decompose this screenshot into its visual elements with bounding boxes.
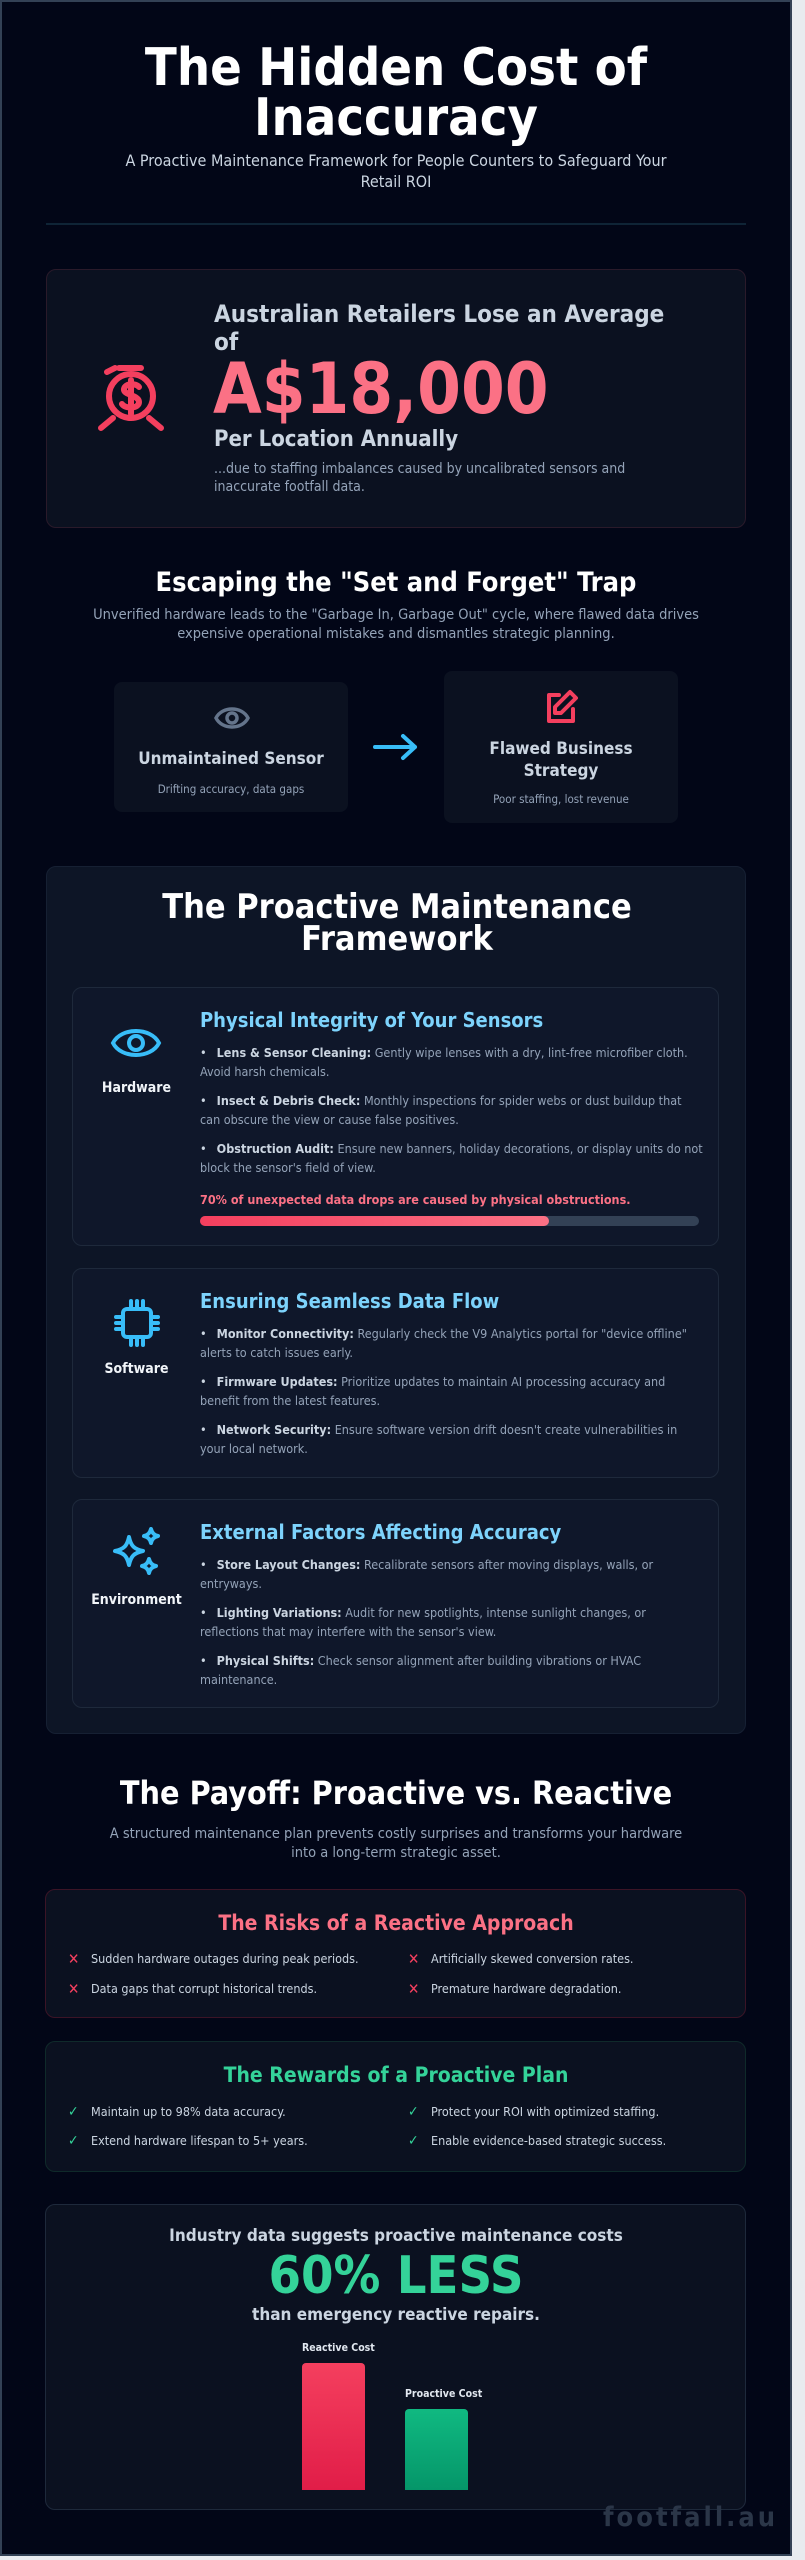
- bullets: Lens & Sensor Cleaning: Gently wipe lenses with a dry, lint-free microfiber cloth. Avoid harsh chemicals.: [200, 1045, 688, 1079]
- bullets: Insect & Debris Check: Monthly inspections for spider webs or dust buildup that can obscure the view or cause false positives.: [200, 1093, 682, 1127]
- card: environment: [72, 1499, 719, 1708]
- risk items: ✕: [68, 1980, 79, 1998]
- icon: chip: [114, 1299, 160, 1347]
- panel: framework: [46, 866, 746, 1734]
- risk items: ✕: [68, 1950, 79, 1968]
- panel: risks: [45, 1889, 746, 2018]
- bullets: Network Security: Ensure software version drift doesn't create vulnerabilities in your local network.: [200, 1422, 677, 1456]
- title: [489, 739, 633, 781]
- heading: escaping trap: Escaping the "Set and Forget" Trap: [156, 567, 636, 598]
- risk items: Artificially skewed conversion rates.: [431, 1951, 634, 1966]
- sub: Drifting accuracy, data gaps: [158, 782, 304, 796]
- text: than reactive: than emergency reactive repairs.: [252, 2305, 540, 2325]
- risk items: Sudden hardware outages during peak periods.: [91, 1951, 359, 1966]
- bullets: Physical Shifts: Check sensor alignment after building vibrations or HVAC maintenance.: [200, 1653, 641, 1687]
- risk items: Premature hardware degradation.: [431, 1981, 621, 1996]
- text: escaping description: expensive operational mistakes and dismantles strategic planning.: [177, 626, 615, 642]
- bullets: Monitor Connectivity: Regularly check the V9 Analytics portal for "device offline" alerts to catch issues early.: [200, 1326, 687, 1360]
- bullets: Obstruction Audit: Ensure new banners, holiday decorations, or display units do not block the sensor's field of view.: [200, 1141, 703, 1175]
- heading: Ensuring Seamless Data Flow: [200, 1289, 499, 1313]
- heading: rewards: The Rewards of a Proactive Plan: [224, 2063, 568, 2087]
- heading: framework: The Proactive Maintenance: [162, 887, 632, 927]
- description: ...due to staffing imbalances caused by uncalibrated sensors and: [214, 461, 625, 477]
- reward items: Maintain up to 98% data accuracy.: [91, 2104, 286, 2119]
- reward items: ✓: [68, 2104, 79, 2120]
- title: [145, 38, 648, 148]
- text: payoff description: into a long-term strategic asset.: [291, 1845, 501, 1861]
- icon: eye grey: [214, 707, 250, 729]
- bar: reactive: [302, 2342, 375, 2490]
- per location: Per Location Annually: [214, 427, 458, 452]
- big number: A$18,000: [213, 348, 549, 430]
- icon: edit pen: [547, 690, 578, 723]
- risk items: ✕: [408, 1980, 419, 1998]
- title: Inaccuracy: [254, 88, 538, 148]
- risk items: [68, 1950, 634, 1998]
- label: Software: [104, 1361, 169, 1377]
- arrow: [373, 734, 418, 760]
- reward items: ✓: [408, 2133, 419, 2149]
- panel: cost comparison: [45, 2204, 746, 2510]
- bullets: Store Layout Changes: Recalibrate sensors after moving displays, walls, or entryways.: [200, 1557, 653, 1591]
- card: hardware: [72, 987, 719, 1246]
- subtitle: A Proactive Maintenance Framework for People Counters to Safeguard Your Retail ROI: [125, 151, 667, 191]
- bullets: [200, 1326, 687, 1456]
- reward items: [68, 2104, 666, 2149]
- reward items: Extend hardware lifespan to 5+ years.: [91, 2133, 308, 2148]
- panel: loss stat card: [46, 269, 746, 528]
- bar: reactive: Reactive Cost: [302, 2342, 375, 2354]
- panel: rewards: [45, 2041, 746, 2172]
- label: Hardware: [102, 1080, 171, 1096]
- bullets: [200, 1557, 654, 1687]
- bullets: [200, 1045, 703, 1175]
- text: payoff description: [110, 1826, 682, 1861]
- risk items: Data gaps that corrupt historical trends.: [91, 1981, 317, 1996]
- icon: sparkles: [113, 1527, 160, 1575]
- card: software: [72, 1268, 719, 1478]
- text: escaping description: Unverified hardware leads to the "Garbage In, Garbage Out" cycle, where flawed data drives: [93, 607, 699, 623]
- heading: Physical Integrity of Your Sensors: [200, 1008, 543, 1032]
- heading: framework: Framework: [301, 919, 493, 959]
- panel: flawed strategy: [444, 671, 678, 823]
- stat text: 70% of unexpected data drops are caused by physical obstructions.: [200, 1192, 631, 1207]
- reward items: Enable evidence-based strategic success.: [431, 2133, 666, 2148]
- title: Flawed Business: [489, 739, 633, 759]
- text: industry data: Industry data suggests proactive maintenance costs: [169, 2226, 623, 2246]
- heading: [214, 300, 664, 356]
- label: Environment: [91, 1592, 182, 1608]
- reward items: ✓: [408, 2104, 419, 2120]
- panel: unmaintained sensor: [114, 682, 348, 812]
- bar: proactive: Proactive Cost: [405, 2388, 482, 2400]
- bar chart: [302, 2342, 482, 2490]
- risk items: ✕: [408, 1950, 419, 1968]
- reward items: ✓: [68, 2133, 79, 2149]
- heading: payoff: The Payoff: Proactive vs. Reactive: [120, 1774, 672, 1812]
- watermark: footfall.au: [603, 2502, 778, 2533]
- description: inaccurate footfall data.: [214, 479, 365, 495]
- title: The Hidden Cost of: [145, 38, 647, 98]
- text: payoff description: A structured maintenance plan prevents costly surprises and transforms your hardware: [110, 1826, 682, 1842]
- bullets: Lighting Variations: Audit for new spotlights, intense sunlight changes, or reflections that may interfere with the sensor's view.: [200, 1605, 646, 1639]
- heading: risks: The Risks of a Reactive Approach: [218, 1911, 574, 1935]
- bar: proactive: [405, 2388, 482, 2490]
- heading: External Factors Affecting Accuracy: [200, 1520, 561, 1544]
- icon: alarm clock dollar: [98, 365, 164, 431]
- reward items: Protect your ROI with optimized staffing.: [431, 2104, 659, 2119]
- progress bar: [200, 1216, 699, 1226]
- bullets: Firmware Updates: Prioritize updates to maintain AI processing accuracy and benefit from the latest features.: [200, 1374, 665, 1408]
- heading: Australian Retailers Lose an Average: [214, 300, 664, 328]
- text: escaping description: [93, 607, 699, 642]
- big stat: 60% LESS: [268, 2246, 524, 2306]
- icon: eye: [110, 1029, 162, 1057]
- sub: Poor staffing, lost revenue: [493, 792, 629, 806]
- heading: framework: [162, 887, 632, 959]
- heading: of: [214, 328, 238, 356]
- title: Unmaintained Sensor: [138, 749, 324, 769]
- title: Strategy: [524, 761, 598, 781]
- description: [214, 461, 625, 495]
